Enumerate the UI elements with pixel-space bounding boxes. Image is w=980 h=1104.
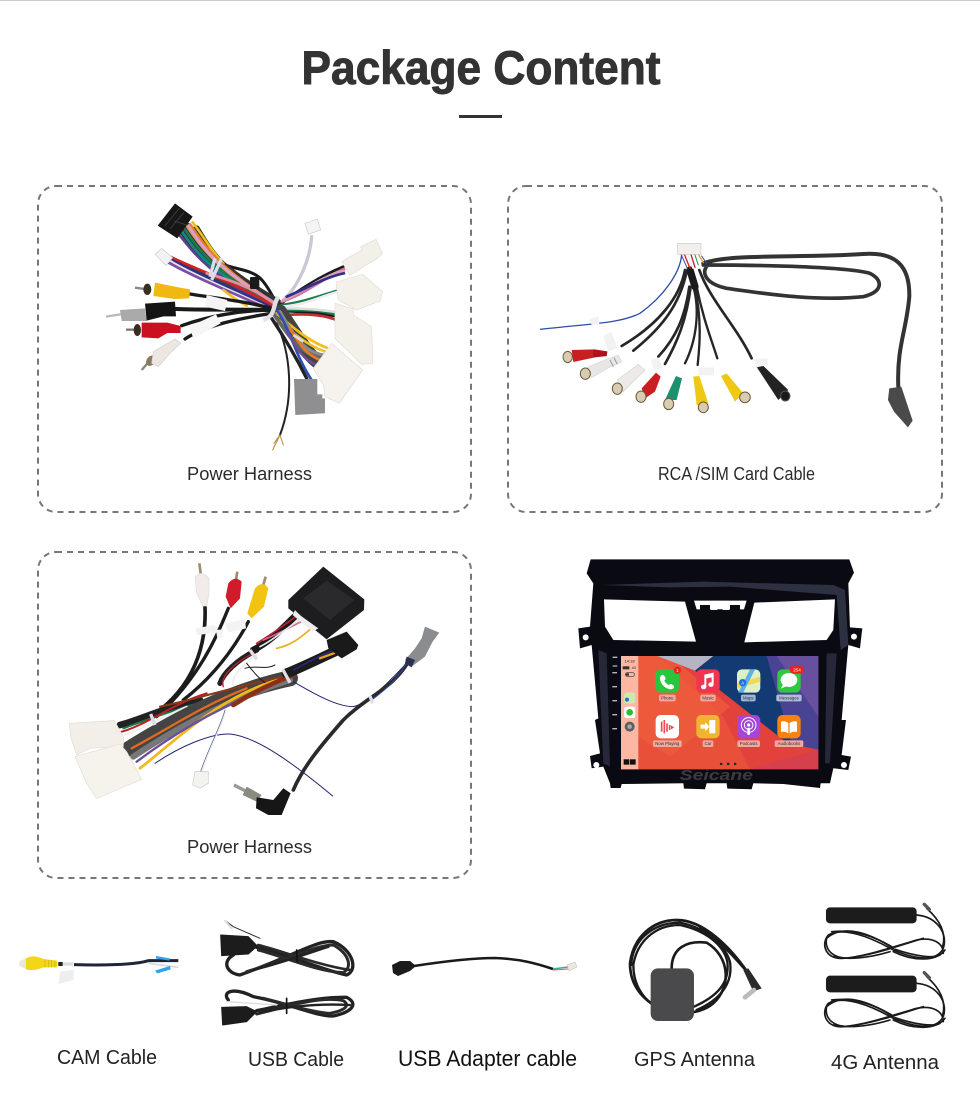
cable labels — [205, 295, 227, 311]
app icon: Music — [696, 669, 720, 701]
grey antenna-side connector — [405, 627, 439, 667]
title: Package Content — [302, 41, 661, 94]
cable ties — [151, 650, 373, 725]
right-angle antenna plug — [234, 785, 291, 815]
red RCA plug — [226, 572, 242, 608]
small white connector — [193, 772, 208, 788]
panel frame — [508, 186, 942, 512]
image: GPS antenna — [630, 920, 762, 1021]
item: CAM cable — [19, 956, 178, 1069]
label: CAM Cable — [57, 1047, 157, 1069]
white RCA plug — [195, 563, 209, 606]
app icon: Now Playing: Now Playing — [655, 741, 680, 746]
white multi-pin connector — [678, 243, 701, 254]
20-pin black connector — [158, 203, 193, 238]
app icon: Messages: Messages — [779, 695, 799, 700]
green RCA jack — [664, 376, 682, 410]
yellow RCA jack 2 — [721, 373, 750, 403]
label: USB Cable — [248, 1049, 344, 1071]
RCA red plug — [126, 323, 181, 338]
app icon: Phone: 1 — [676, 668, 679, 673]
app icon: Podcasts: Podcasts — [740, 741, 758, 746]
bezel side buttons — [612, 657, 617, 729]
left vent opening — [604, 599, 696, 642]
app icon: Phone — [656, 667, 681, 701]
image: 4G antennas — [825, 904, 945, 1027]
panel: power harness 1 — [38, 186, 471, 512]
image: adapter cable — [392, 958, 577, 976]
black connector — [327, 632, 358, 658]
app icon: Car: Car — [704, 741, 712, 746]
RCA white plug — [142, 339, 181, 370]
RCA yellow plug — [135, 283, 190, 299]
watermark: Seicane — [680, 768, 753, 784]
image: USB cables — [221, 921, 353, 1025]
app icon: Now Playing — [653, 715, 682, 747]
panel frame — [38, 186, 471, 512]
centre clips — [700, 605, 740, 625]
page dots — [721, 760, 735, 767]
label: Power Harness — [187, 464, 312, 484]
fascia highlight — [602, 582, 848, 650]
label: GPS Antenna — [634, 1049, 756, 1071]
cable ties — [210, 258, 222, 280]
yellow RCA jack — [693, 376, 708, 413]
centre notch — [694, 601, 747, 609]
app icon: Audiobooks — [775, 715, 803, 747]
item: USB cable — [221, 921, 353, 1071]
app icon: Maps: Maps — [743, 695, 754, 700]
CarPlay sidebar: 4G — [632, 666, 637, 670]
mounting holes — [583, 634, 857, 768]
label: RCA /SIM Card Cable — [658, 464, 815, 484]
app icon: Maps — [737, 669, 760, 701]
image: power harness with control box — [69, 563, 439, 815]
black audio jack — [756, 364, 790, 401]
item: 4G antenna — [825, 904, 945, 1074]
app icon: Messages: 254 — [793, 668, 801, 673]
grey plug — [294, 379, 325, 415]
app icon: Messages — [776, 666, 804, 701]
right vent opening — [744, 599, 835, 642]
SIM reader module — [888, 387, 913, 427]
screen wallpaper — [621, 656, 818, 769]
label: Power Harness — [187, 837, 312, 857]
phone plug connector — [305, 219, 321, 234]
CarPlay sidebar — [621, 656, 638, 769]
app icon: Maps: A — [741, 680, 744, 685]
red RCA jack 2 — [636, 373, 661, 402]
app icon: Music: Music — [702, 695, 714, 700]
white plug lower — [75, 744, 142, 799]
cable tags — [589, 316, 768, 375]
small white connector — [155, 248, 173, 266]
head unit: car radio with CarPlay screen — [578, 559, 862, 789]
CarPlay sidebar: 14:18 — [625, 658, 635, 663]
red RCA jack — [563, 349, 607, 363]
panel: power harness 2 — [38, 552, 471, 878]
glossy black fascia — [578, 559, 862, 789]
image: RCA and SIM cable — [541, 243, 913, 427]
item: USB adapter cable — [392, 958, 577, 1071]
image: power harness with RCA plugs — [106, 203, 383, 450]
label: 4G Antenna — [831, 1052, 940, 1074]
white plug upper — [69, 721, 123, 755]
RCA antenna plug — [106, 302, 176, 321]
app icon: Audiobooks: Audiobooks — [778, 741, 800, 746]
panel frame — [38, 552, 471, 878]
panel: RCA / SIM card cable — [508, 186, 942, 512]
image: CAM cable — [19, 956, 178, 984]
cable tags — [195, 619, 246, 638]
label: USB Adapter cable — [398, 1046, 577, 1071]
white harness plugs — [342, 239, 383, 275]
app icon: Podcasts — [737, 715, 760, 747]
clip gaps — [711, 605, 729, 610]
control box — [288, 567, 364, 639]
white ribbed RCA jack — [580, 355, 622, 379]
item: GPS antenna — [630, 920, 762, 1071]
app icon: Phone: Phone — [661, 695, 674, 700]
title underline — [459, 115, 502, 118]
white RCA jack — [612, 364, 645, 394]
yellow RCA plug — [247, 577, 268, 618]
app icon: Car — [696, 715, 720, 747]
